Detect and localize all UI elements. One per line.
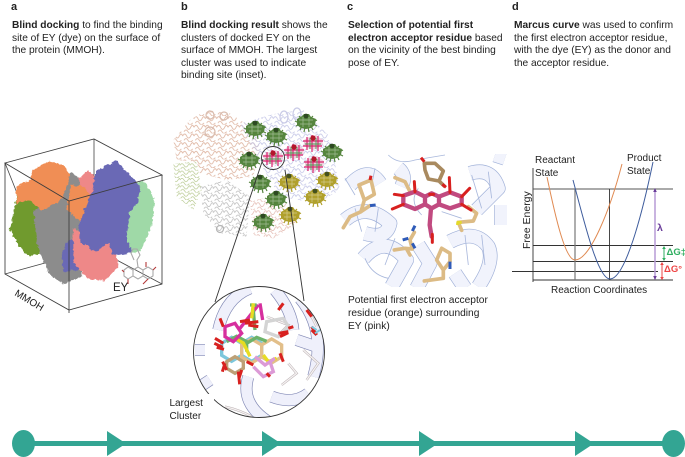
reactant curve <box>547 164 622 260</box>
green EY clusters <box>238 114 343 232</box>
EY label: EY <box>113 282 129 294</box>
protein surface <box>10 161 155 284</box>
EY molecule <box>122 249 156 284</box>
panel d heading: the acceptor residue. <box>514 58 609 69</box>
arrowhead 2 <box>262 431 281 456</box>
panel c heading: Selection of potential first <box>348 20 474 31</box>
arrowhead 1 <box>107 431 126 456</box>
panel b: protein ribbon overview <box>173 108 343 238</box>
panel a: MMOH protein in docking box <box>5 139 162 313</box>
panel d heading: Marcus curve was used to confirm <box>514 20 673 31</box>
axes and energy levels <box>512 168 673 282</box>
EY dye, pink <box>403 192 462 237</box>
timeline arrow <box>12 430 685 457</box>
delta G double-dagger arrow <box>663 247 665 260</box>
heteroatoms <box>370 158 446 187</box>
panel b heading: clusters of docked EY on the <box>181 33 311 44</box>
panel b heading: binding site (inset). <box>181 70 267 81</box>
panel c heading: on the vicinity of the best binding <box>348 45 496 56</box>
inset label: Cluster <box>170 411 202 422</box>
chart labels: State <box>627 166 651 177</box>
panel a heading <box>11 1 163 56</box>
panel d heading: with the dye (EY) as the donor and <box>513 45 671 56</box>
magenta EY clusters <box>263 135 324 173</box>
yellow EY clusters <box>278 172 338 225</box>
arrowhead 4 <box>575 431 594 456</box>
inset: largest cluster <box>194 286 324 422</box>
panel b heading: b <box>181 1 188 13</box>
start node <box>12 430 35 457</box>
cube front edges <box>5 139 162 313</box>
product curve <box>573 162 653 279</box>
panel c heading: pose of EY. <box>348 58 399 69</box>
panel c: residues around the dye <box>343 155 505 288</box>
inset label: Largest <box>170 398 203 409</box>
chart labels: Product <box>627 153 662 164</box>
chart labels: Free Energy <box>521 190 533 249</box>
delta G standard arrow <box>661 263 663 279</box>
chart labels: ΔG° <box>664 264 682 275</box>
tan residues <box>343 178 477 281</box>
end node <box>662 430 685 457</box>
panel a heading: Blind docking to find the binding <box>12 20 163 31</box>
ribbon regions <box>173 110 340 238</box>
panel b heading: cluster was used to indicate <box>181 58 306 69</box>
panel a heading: the protein (MMOH). <box>12 45 105 56</box>
chart labels <box>521 153 685 296</box>
inset label <box>168 394 214 424</box>
panel c heading: c <box>347 1 353 13</box>
panel b heading: Blind docking result shows the <box>181 20 328 31</box>
chart labels: State <box>535 168 559 179</box>
panel d heading: the first electron acceptor residue, <box>514 33 667 44</box>
helices <box>205 111 228 232</box>
panel c caption: residue (orange) surrounding <box>348 308 480 319</box>
chart labels: Reaction Coordinates <box>551 285 647 296</box>
panel c caption <box>348 295 488 332</box>
protein ribbon <box>345 155 505 288</box>
panel b heading <box>181 1 328 81</box>
panel d heading: d <box>512 1 519 13</box>
panel a heading: site of EY (dye) on the surface of <box>12 33 160 44</box>
panel c heading: electron acceptor residue based <box>348 33 503 44</box>
chart labels: λ <box>657 222 663 234</box>
chart labels: Reactant <box>535 155 575 166</box>
arrowhead 3 <box>419 431 438 456</box>
panel c caption: Potential first electron acceptor <box>348 295 488 306</box>
panel d heading <box>512 1 673 69</box>
lambda arrow <box>654 190 656 279</box>
panel c caption: EY (pink) <box>348 321 390 332</box>
panel c heading <box>347 1 503 69</box>
panel a heading: a <box>11 1 18 13</box>
docked dye poses <box>222 303 288 377</box>
panel d: Marcus curve chart <box>512 153 685 296</box>
selection circle and zoom lines <box>215 146 304 302</box>
MMOH axis label: MMOH <box>12 288 45 314</box>
panel b heading: surface of MMOH. The largest <box>181 45 317 56</box>
